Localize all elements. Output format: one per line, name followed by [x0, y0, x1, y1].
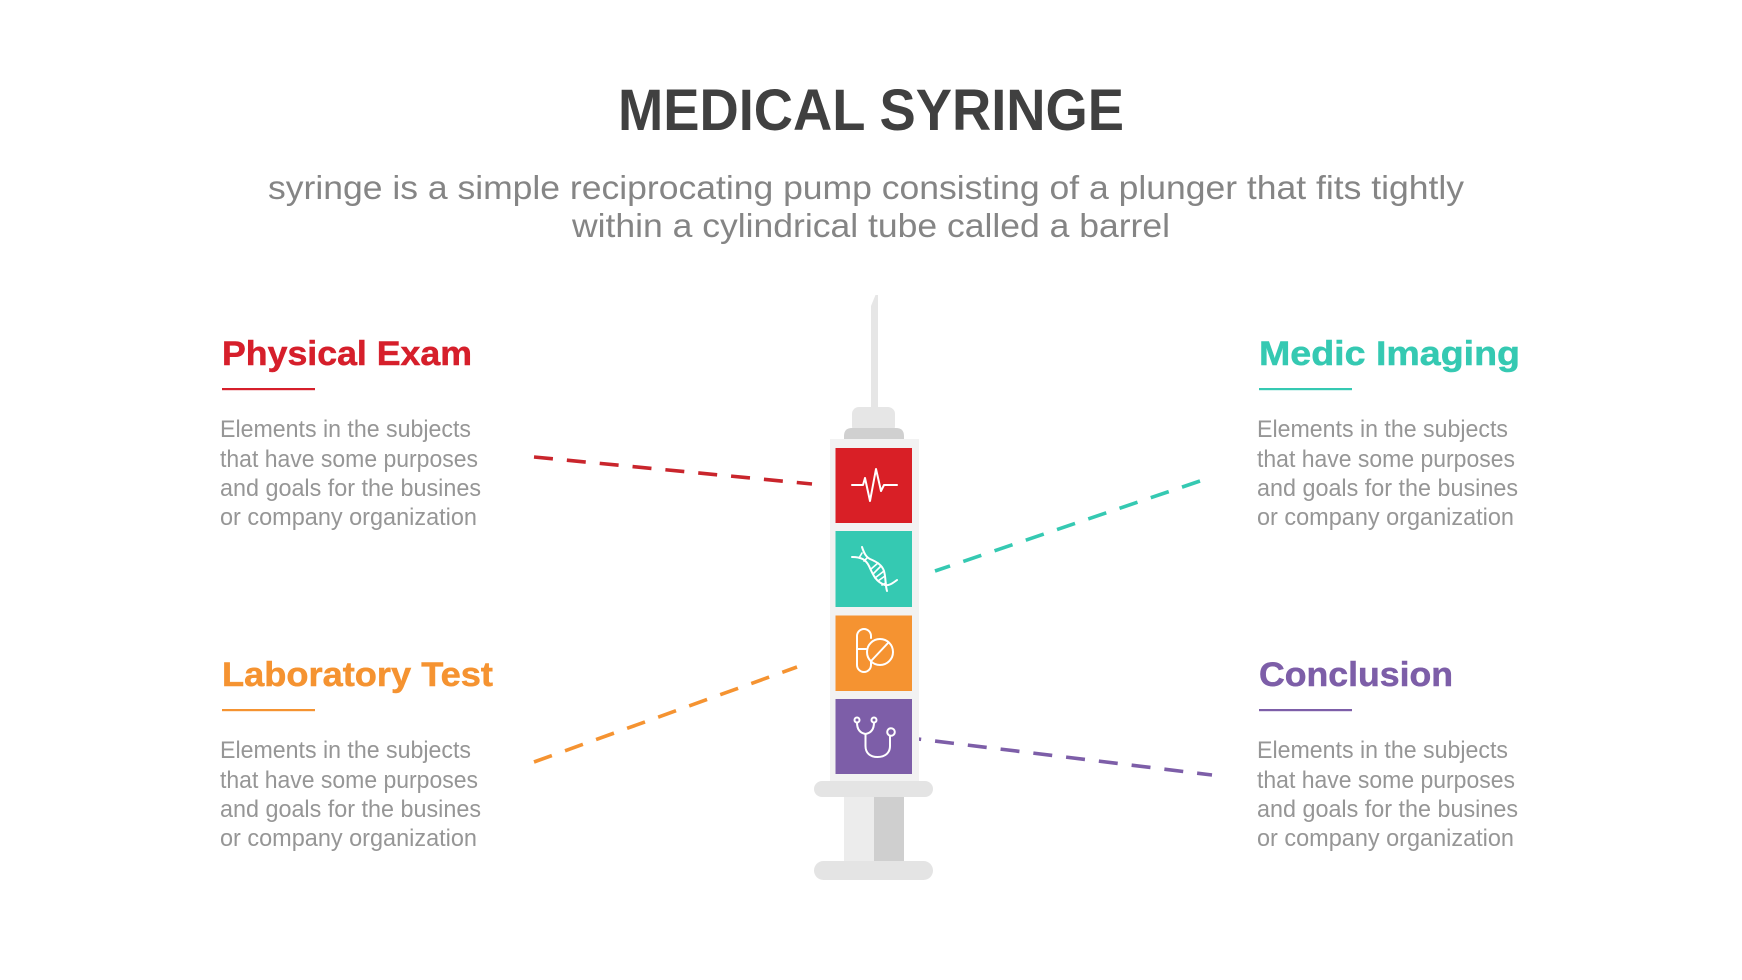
- icon: pills: [857, 629, 893, 672]
- heading: laboratory test: Laboratory Test: [222, 656, 493, 694]
- panel: medic imaging: [1257, 335, 1520, 531]
- text: conclusion: [1257, 737, 1518, 852]
- title: MEDICAL SYRINGE: [618, 78, 1124, 143]
- underline: medic imaging: [1259, 388, 1352, 390]
- text: physical exam: [220, 416, 481, 531]
- text: laboratory test: and goals for the busines: [220, 796, 481, 823]
- text: physical exam: and goals for the busines: [220, 475, 481, 502]
- heading: physical exam: Physical Exam: [222, 335, 472, 373]
- needle: [871, 295, 878, 407]
- plunger rod: [844, 797, 904, 861]
- text: medic imaging: and goals for the busines: [1257, 475, 1518, 502]
- text: medic imaging: Elements in the subjects: [1257, 416, 1508, 443]
- text: laboratory test: or company organization: [220, 825, 477, 852]
- panel: laboratory test: [220, 656, 493, 852]
- text: conclusion: and goals for the busines: [1257, 796, 1518, 823]
- panel: conclusion: [1257, 656, 1518, 852]
- hub: [844, 407, 904, 439]
- heading: medic imaging: Medic Imaging: [1259, 335, 1520, 373]
- text: physical exam: that have some purposes: [220, 446, 478, 473]
- icon: dna: [852, 547, 897, 591]
- syringe: [814, 295, 933, 880]
- finger flange: [814, 781, 933, 797]
- text: physical exam: Elements in the subjects: [220, 416, 471, 443]
- text: conclusion: that have some purposes: [1257, 767, 1515, 794]
- panel: physical exam: [220, 335, 481, 531]
- connector: conclusion: [918, 739, 1212, 775]
- text: laboratory test: Elements in the subjects: [220, 737, 471, 764]
- barrel: [830, 439, 919, 782]
- icon: heartbeat: [852, 469, 897, 501]
- connector: laboratory test: [534, 667, 797, 762]
- icon: stethoscope: [854, 718, 895, 757]
- text: medic imaging: that have some purposes: [1257, 446, 1515, 473]
- heading: conclusion: Conclusion: [1259, 656, 1453, 694]
- text: medic imaging: [1257, 416, 1518, 531]
- segment: teal dna: [836, 531, 912, 607]
- underline: laboratory test: [222, 709, 315, 711]
- plunger thumb rest: [814, 861, 933, 880]
- segment: orange pills: [836, 616, 912, 691]
- underline: physical exam: [222, 388, 315, 390]
- text: medic imaging: or company organization: [1257, 504, 1514, 531]
- underline: conclusion: [1259, 709, 1352, 711]
- connector: physical exam: [534, 457, 812, 484]
- text: physical exam: or company organization: [220, 504, 477, 531]
- text: conclusion: or company organization: [1257, 825, 1514, 852]
- connector: medic imaging: [935, 481, 1200, 571]
- segment: red heartbeat: [836, 448, 912, 523]
- text: conclusion: Elements in the subjects: [1257, 737, 1508, 764]
- text: laboratory test: [220, 737, 481, 852]
- segment: purple stethoscope: [836, 699, 912, 774]
- subtitle: [268, 169, 1465, 244]
- subtitle: syringe is a simple reciprocating pump consisting of a plunger that fits tightly: [268, 169, 1465, 206]
- subtitle: within a cylindrical tube called a barrel: [571, 207, 1170, 244]
- text: laboratory test: that have some purposes: [220, 767, 478, 794]
